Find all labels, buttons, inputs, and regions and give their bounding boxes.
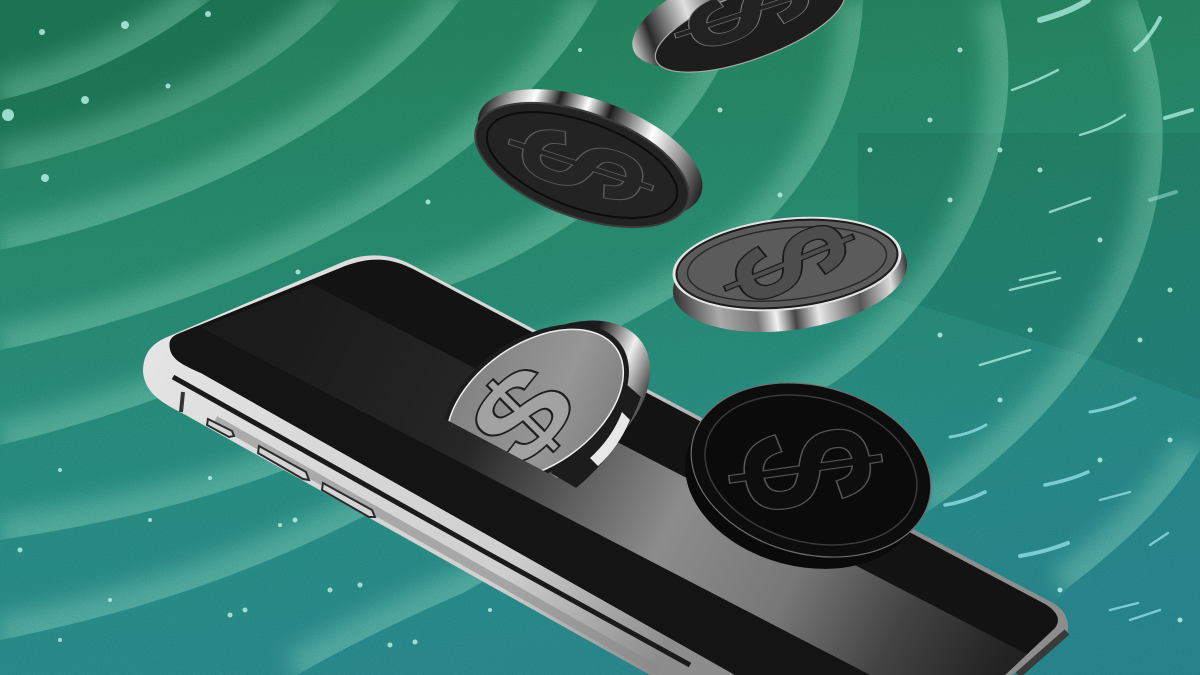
coin: right middle bbox=[666, 200, 914, 346]
coin face bbox=[444, 324, 629, 474]
background: dark top-left rings bbox=[0, 0, 340, 170]
coin: upper left bbox=[459, 63, 719, 252]
coin rim bbox=[666, 210, 914, 346]
coin: entering phone slot bbox=[444, 320, 650, 488]
phone: shaded lower side bbox=[215, 420, 660, 672]
coin rim: highlight bbox=[590, 412, 630, 466]
phone: dark lower-right edge bbox=[1018, 632, 1067, 675]
coin rim bbox=[619, 0, 845, 89]
phone: lower bevel band bbox=[150, 302, 870, 675]
phone: side notch bbox=[181, 392, 183, 412]
smartphone bbox=[143, 250, 1100, 675]
coin rim bbox=[461, 63, 719, 245]
phone: side buttons bbox=[207, 419, 375, 517]
background: dark panel at right bbox=[858, 133, 1200, 400]
phone: metal frame bbox=[143, 255, 1068, 675]
coin shadow edge bbox=[665, 370, 941, 594]
dollar sign: $ bbox=[476, 107, 691, 224]
coin face bbox=[459, 78, 705, 252]
dollar sign: $ bbox=[444, 337, 600, 493]
phone: screen bbox=[150, 250, 1100, 675]
background: light streaks at right bbox=[945, 0, 1192, 620]
phone: dark gap under bezel bbox=[173, 377, 690, 665]
coin rim bbox=[550, 320, 650, 478]
coin rim: lower tip bbox=[551, 383, 641, 488]
coin face bbox=[645, 0, 855, 91]
coin face bbox=[671, 357, 951, 583]
phone: screen top band bbox=[160, 250, 1070, 675]
dollar sign: $ bbox=[697, 415, 917, 522]
coin: top, partly cropped bbox=[619, 0, 856, 91]
coin: large black foreground bbox=[665, 357, 951, 594]
dollar sign: $ bbox=[692, 200, 889, 323]
phone: middle lit band bbox=[262, 284, 1027, 675]
coin face bbox=[668, 206, 906, 322]
